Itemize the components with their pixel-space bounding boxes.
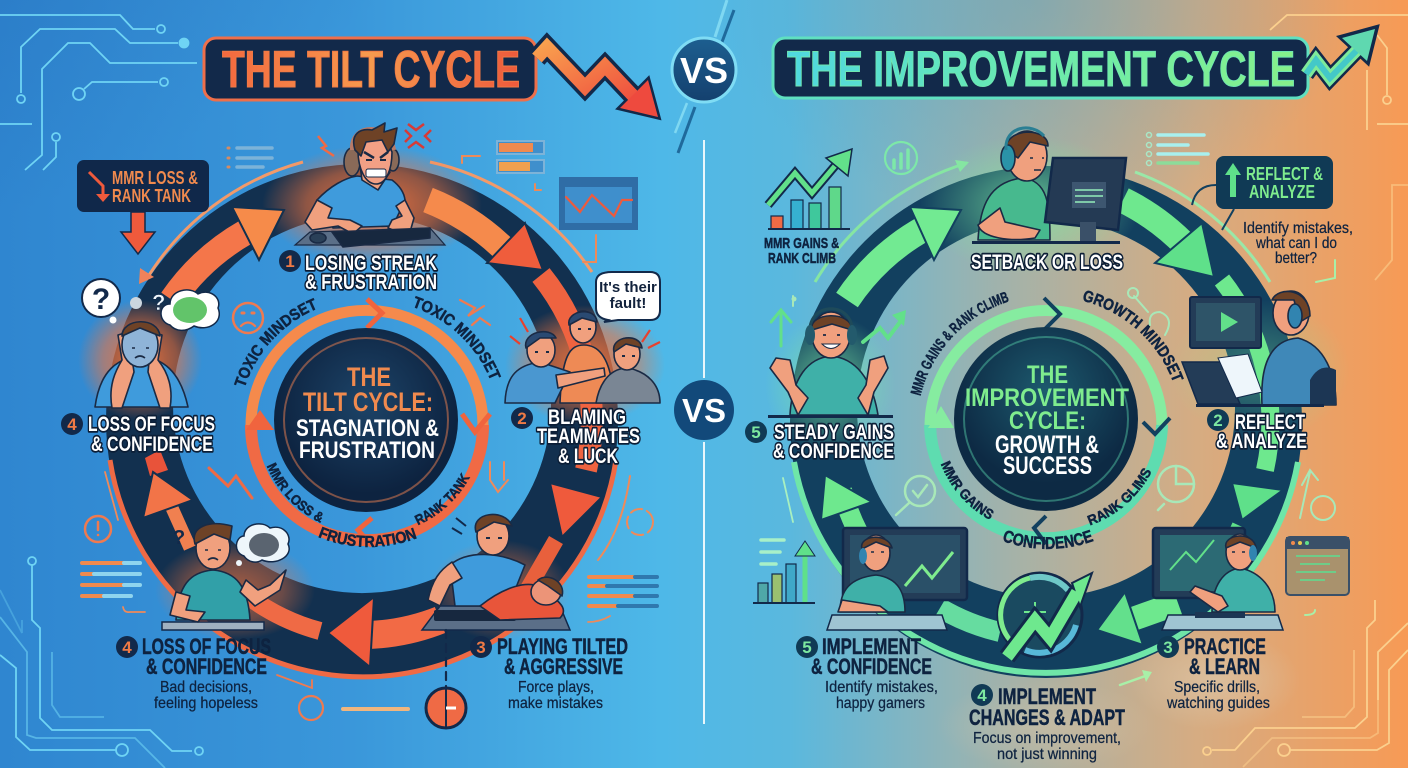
figure: blaming teammates — [505, 311, 660, 403]
ring captions — [234, 296, 502, 548]
arrow: up to streak — [172, 207, 284, 300]
callout note: Identify mistakes, — [1243, 220, 1353, 237]
step labels: SETBACK OR LOSS — [971, 251, 1123, 274]
thought cloud green — [161, 290, 219, 330]
step labels: & CONFIDENCE — [91, 433, 213, 456]
step labels: 2 — [1213, 411, 1223, 430]
figure: angry player — [295, 123, 445, 247]
icon: question bubble: ? — [152, 290, 165, 315]
step labels: & CONFIDENCE — [773, 440, 894, 463]
ring captions: GROWTH MINDSET — [1083, 290, 1184, 380]
step labels: & CONFIDENCE — [811, 654, 932, 679]
panel: improvement cycle — [745, 126, 1353, 763]
step labels: 4 — [977, 686, 987, 705]
step labels: 5 — [802, 638, 812, 657]
ring captions: FRUSTRATION — [318, 526, 417, 548]
icon: gauge — [426, 688, 466, 728]
step labels: not just winning — [997, 746, 1097, 763]
arrow: to setback — [847, 207, 961, 300]
center disc — [274, 328, 458, 512]
center disc: THE — [347, 362, 391, 392]
step labels: BLAMING — [548, 406, 626, 429]
step labels: & ANALYZE — [1216, 430, 1307, 453]
decor icons right — [761, 132, 1335, 685]
step labels: & AGGRESSIVE — [504, 654, 623, 679]
title: the tilt cycle — [204, 38, 536, 100]
figure: implement — [827, 528, 967, 630]
glow behind figures — [78, 145, 665, 640]
vs badge top — [672, 38, 736, 102]
step labels: happy gamers — [836, 695, 925, 712]
step labels: 4 — [67, 415, 77, 434]
decor icons left — [82, 141, 657, 720]
speech bubble — [596, 272, 660, 322]
step labels: 3 — [476, 638, 486, 657]
step labels: LOSS OF FOCUS — [142, 634, 271, 659]
step labels: Specific drills, — [1174, 679, 1260, 696]
icon: anger mark — [318, 124, 431, 156]
figure: loss of focus desk — [162, 524, 286, 630]
step labels: make mistakes — [508, 695, 603, 712]
figure: cheering — [768, 309, 893, 418]
step labels: Focus on improvement, — [973, 730, 1121, 747]
arrow: setback to reflect — [1123, 200, 1214, 277]
callout note — [1243, 220, 1353, 267]
speech bubble: It's their — [599, 279, 657, 296]
center disc — [954, 327, 1138, 511]
ring captions: RANK GLIMS — [1086, 468, 1151, 526]
step labels: 2 — [517, 409, 527, 428]
step labels — [61, 250, 640, 712]
step labels: 4 — [122, 638, 132, 657]
vs badge top: VS — [680, 50, 728, 91]
icon: mmr gains bars: RANK CLIMB — [768, 250, 836, 267]
arrow: focus up — [143, 450, 193, 549]
step labels: TEAMMATES — [537, 425, 640, 448]
step labels: & LUCK — [558, 445, 618, 468]
arrow: reflect to practice — [1222, 280, 1283, 560]
icon: mmr gains bars — [764, 149, 852, 267]
step labels: & LEARN — [1189, 654, 1260, 679]
step labels: & CONFIDENCE — [146, 654, 267, 679]
outer ring band — [106, 162, 618, 677]
icon: adapt cycle — [998, 573, 1092, 657]
callout note: what can I do — [1255, 235, 1337, 252]
figure: setback player with monitor — [972, 128, 1126, 244]
figure: reflect watching replay — [1182, 291, 1336, 407]
step labels: 1 — [285, 252, 295, 271]
outer ring band — [790, 160, 1302, 678]
step labels: 5 — [751, 423, 761, 442]
step labels: watching guides — [1166, 695, 1270, 712]
step labels: IMPLEMENT — [822, 634, 921, 659]
icon: mmr gains bars: MMR GAINS & — [764, 235, 839, 252]
ring captions — [910, 290, 1184, 550]
step labels — [745, 251, 1307, 763]
icon: question bubble: ? — [92, 283, 110, 316]
step labels: & FRUSTRATION — [305, 271, 437, 294]
step labels: IMPLEMENT — [998, 684, 1096, 709]
ring captions: MMR LOSS & — [266, 462, 323, 523]
thought cloud gray — [236, 524, 289, 566]
vs badge middle: VS — [682, 392, 726, 429]
arrow: up left — [821, 475, 872, 532]
speech bubble: fault! — [610, 295, 646, 312]
center disc: TILT CYCLE: — [303, 387, 433, 417]
callout: reflect and analyze: ANALYZE — [1249, 182, 1315, 202]
center disc: STAGNATION & — [296, 415, 439, 442]
callout: mmr loss: RANK TANK — [112, 186, 191, 206]
inner ring — [928, 298, 1170, 544]
step labels: Force plays, — [518, 679, 594, 696]
arrow: callout down — [121, 212, 155, 254]
vs badge middle — [674, 380, 734, 440]
arrow: streak to blame — [428, 200, 543, 270]
arrow: blame to tilted — [526, 275, 602, 592]
callout: mmr loss: MMR LOSS & — [112, 168, 198, 188]
step labels: PLAYING TILTED — [497, 634, 628, 659]
title: the tilt cycle: THE TILT CYCLE — [222, 41, 520, 99]
step labels: STEADY GAINS — [774, 421, 894, 444]
center divider — [675, 0, 734, 724]
arrow: practice to implement — [1097, 592, 1178, 645]
figure: practice — [1153, 528, 1283, 630]
arrow: tilted to loss of focus — [240, 590, 440, 667]
center disc: IMPROVEMENT — [965, 384, 1129, 412]
step labels: PRACTICE — [1184, 634, 1266, 659]
step labels: LOSS OF FOCUS — [88, 413, 215, 436]
center disc: CYCLE: — [1009, 407, 1086, 435]
center disc: GROWTH & — [995, 431, 1099, 459]
arrow: green uptrend zigzag — [1306, 27, 1377, 78]
step labels: LOSING STREAK — [305, 252, 437, 275]
step labels: REFLECT — [1235, 411, 1305, 434]
inner ring — [246, 299, 490, 546]
ring captions: MMR GAINS — [940, 460, 994, 519]
figure: playing tilted — [422, 515, 570, 630]
arrow: red downtrend zigzag — [537, 47, 658, 117]
center disc: THE — [1027, 361, 1068, 389]
step labels: Identify mistakes, — [825, 679, 938, 696]
ring captions: CONFIDENCE — [1004, 530, 1094, 550]
arrow: implement to left — [940, 608, 1000, 632]
step labels: 3 — [1163, 638, 1173, 657]
panel: tilt cycle — [61, 122, 662, 730]
ring captions: MMR GAINS & RANK CLIMB — [910, 292, 1009, 396]
center disc: SUCCESS — [1003, 452, 1092, 480]
ring captions: RANK TANK — [414, 472, 470, 526]
callout: reflect and analyze: REFLECT & — [1246, 164, 1323, 184]
ring captions: TOXIC MINDSET — [234, 298, 316, 386]
step labels: feeling hopeless — [154, 695, 258, 712]
callout: mmr loss — [77, 160, 209, 212]
figure: head in hands — [95, 322, 188, 408]
glow behind figures — [765, 135, 1350, 455]
ring captions: TOXIC MINDSET — [414, 296, 502, 378]
icon: rising bars lower left — [753, 541, 815, 603]
icon: question bubble — [82, 279, 165, 324]
callout note: better? — [1275, 250, 1317, 267]
step labels: CHANGES & ADAPT — [969, 705, 1125, 730]
callout: reflect and analyze — [1192, 156, 1333, 230]
arrow: focus up: ? — [173, 527, 185, 549]
step labels: Bad decisions, — [160, 679, 252, 696]
center disc: FRUSTRATION — [299, 437, 435, 464]
icon: code window — [1286, 537, 1349, 595]
